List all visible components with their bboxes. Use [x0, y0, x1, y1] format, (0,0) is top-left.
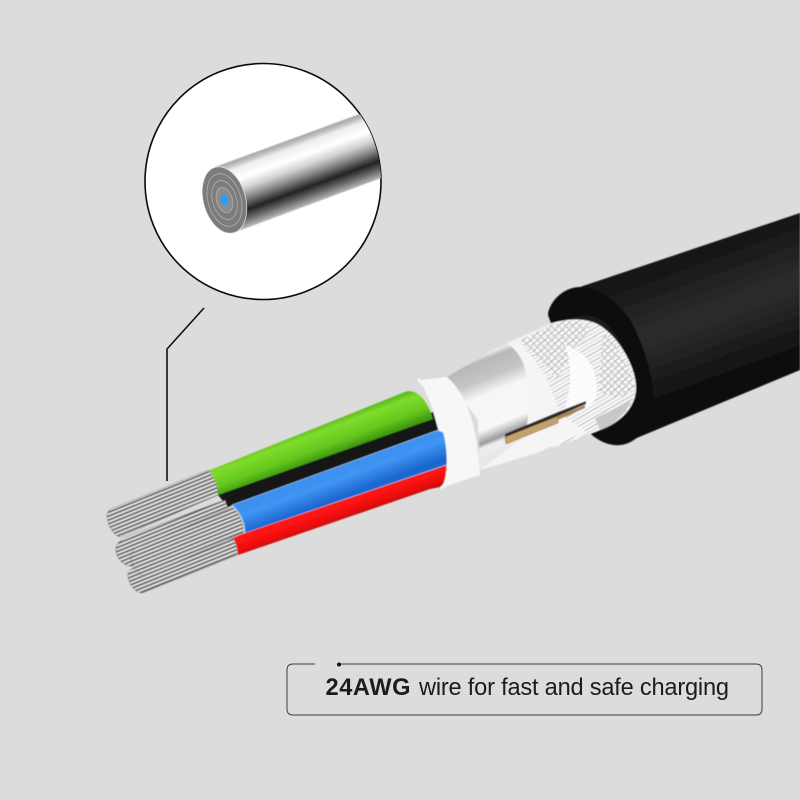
dark groove above gold conductor	[505, 401, 586, 438]
wire: blue	[232, 431, 449, 533]
gold inner conductor	[505, 416, 558, 444]
black outer sheath	[548, 213, 800, 445]
cable assembly	[107, 213, 800, 593]
label text: wire for fast and safe charging	[418, 675, 729, 701]
label box	[287, 662, 762, 715]
silver connector sleeve	[447, 343, 586, 470]
sleeve brushed metal shading	[447, 344, 528, 470]
stripped strands: red wire	[128, 538, 237, 593]
rod cut end with concentric rings	[202, 166, 248, 234]
stripped strands: green wire	[107, 470, 218, 537]
icon: magnified copper rod	[202, 114, 381, 234]
collar inner lip	[418, 379, 448, 488]
sheath inner hole	[565, 316, 636, 431]
braided shield	[520, 320, 636, 445]
infographic canvas	[106, 62, 800, 716]
callout leader line	[167, 308, 204, 481]
wire: black	[218, 412, 438, 507]
stripped strands: blue wire	[131, 507, 243, 576]
label text: 24AWG	[326, 675, 410, 701]
gold conductor thin section	[558, 405, 585, 420]
stripped strands: back wire	[116, 500, 232, 566]
white crimp collar	[420, 377, 480, 488]
magnified wire callout circle	[145, 64, 400, 300]
box dot marker	[337, 662, 341, 666]
wire: red	[233, 465, 447, 555]
metal foil core under braid	[507, 320, 636, 448]
sheath end face	[548, 287, 653, 445]
wire: green	[209, 391, 433, 495]
